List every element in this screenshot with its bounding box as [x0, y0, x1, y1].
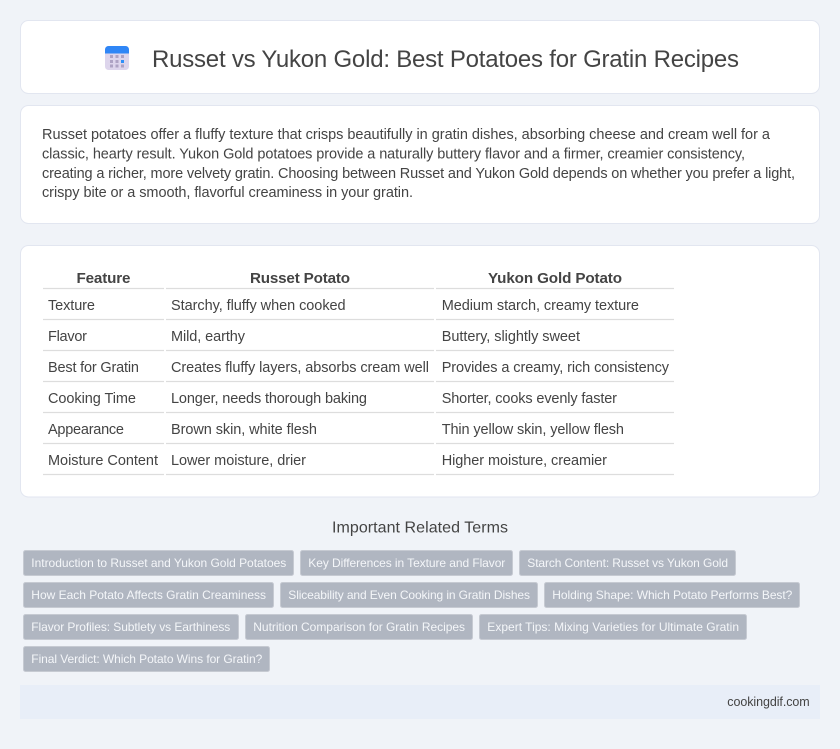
tag: starch content [520, 550, 736, 576]
tag: sliceability: Sliceability and Even Cooking in Gratin Dishes [288, 588, 530, 602]
tag: creaminess [24, 582, 274, 608]
table header row: Yukon Gold Potato [488, 270, 622, 287]
tag: nutrition: Nutrition Comparison for Gratin Recipes [253, 620, 465, 634]
text block: introduction paragraph: crispy bite or a smooth, flavorful creaminess in your gratin. [42, 185, 413, 201]
tag: flavor profiles: Flavor Profiles: Subtlety vs Earthiness [31, 620, 230, 634]
table row: best for gratin: Provides a creamy, rich consistency [442, 360, 670, 376]
icon: calendar [105, 46, 129, 70]
tag: sliceability [280, 582, 538, 608]
panel: header [20, 20, 820, 94]
title: Russet vs Yukon Gold: Best Potatoes for Gratin Recipes [152, 46, 739, 73]
tag: expert tips [480, 614, 746, 640]
related term tags [24, 550, 800, 672]
table row: cooking time: Shorter, cooks evenly faster [442, 391, 617, 407]
panel: comparison table [20, 246, 820, 497]
heading: important related terms: Important Related Terms [332, 520, 508, 536]
tag: key differences [300, 550, 512, 576]
footer source text: cookingdif.com [727, 695, 810, 709]
table row: moisture content [43, 453, 674, 474]
table row: flavor: Mild, earthy [171, 329, 246, 345]
tag: creaminess: How Each Potato Affects Gratin Creaminess [31, 588, 266, 602]
table row: appearance: Brown skin, white flesh [171, 422, 317, 438]
table row: texture: Starchy, fluffy when cooked [171, 298, 346, 314]
table row: flavor [43, 329, 674, 350]
table row: best for gratin: Creates fluffy layers, absorbs cream well [171, 360, 429, 376]
tag: introduction [24, 550, 294, 576]
tag: starch content: Starch Content: Russet vs Yukon Gold [527, 556, 728, 570]
tag: flavor profiles [24, 614, 238, 640]
tag: expert tips: Expert Tips: Mixing Varieties for Ultimate Gratin [487, 620, 739, 634]
footer [20, 685, 820, 719]
table row: appearance: Appearance [48, 422, 124, 438]
text block: introduction paragraph: Russet potatoes offer a fluffy texture that crisps beautifully in gratin dishes, absorbing cheese and cream well for a [42, 127, 771, 143]
text block: introduction paragraph: creating a richer, more velvety gratin. Choosing between Russet and Yukon Gold depends on whether you prefer a light, [42, 166, 795, 182]
table row: cooking time: Cooking Time [48, 391, 136, 407]
panel: introduction [20, 106, 820, 224]
table row: moisture content: Higher moisture, creamier [442, 453, 607, 469]
table header row [43, 270, 674, 288]
table row: texture: Medium starch, creamy texture [442, 298, 639, 314]
table row: cooking time: Longer, needs thorough baking [171, 391, 367, 407]
text block: introduction paragraph [42, 127, 795, 201]
tag: final verdict [24, 646, 270, 672]
table row: best for gratin [43, 360, 674, 382]
text block: introduction paragraph: classic, hearty result. Yukon Gold potatoes provide a naturally buttery flavor and a firmer, creamier consistency, [42, 147, 745, 163]
tag: holding shape [544, 582, 800, 608]
table row: moisture content: Lower moisture, drier [171, 453, 306, 469]
table row: moisture content: Moisture Content [48, 453, 158, 469]
table row: flavor: Buttery, slightly sweet [442, 329, 580, 345]
table row: texture: Texture [48, 298, 95, 314]
table row: appearance [43, 422, 674, 444]
tag: key differences: Key Differences in Texture and Flavor [308, 556, 505, 570]
table row: cooking time [43, 391, 674, 412]
table row: texture [43, 298, 674, 320]
table header row: Feature [76, 270, 130, 287]
tag: holding shape: Holding Shape: Which Potato Performs Best? [552, 588, 793, 602]
table row: best for gratin: Best for Gratin [48, 360, 139, 376]
table row: appearance: Thin yellow skin, yellow flesh [442, 422, 624, 438]
table header row: Russet Potato [250, 270, 350, 287]
tag: final verdict: Final Verdict: Which Potato Wins for Gratin? [31, 652, 263, 666]
tag: introduction: Introduction to Russet and Yukon Gold Potatoes [31, 556, 286, 570]
table row: flavor: Flavor [48, 329, 87, 345]
tag: nutrition [246, 614, 472, 640]
